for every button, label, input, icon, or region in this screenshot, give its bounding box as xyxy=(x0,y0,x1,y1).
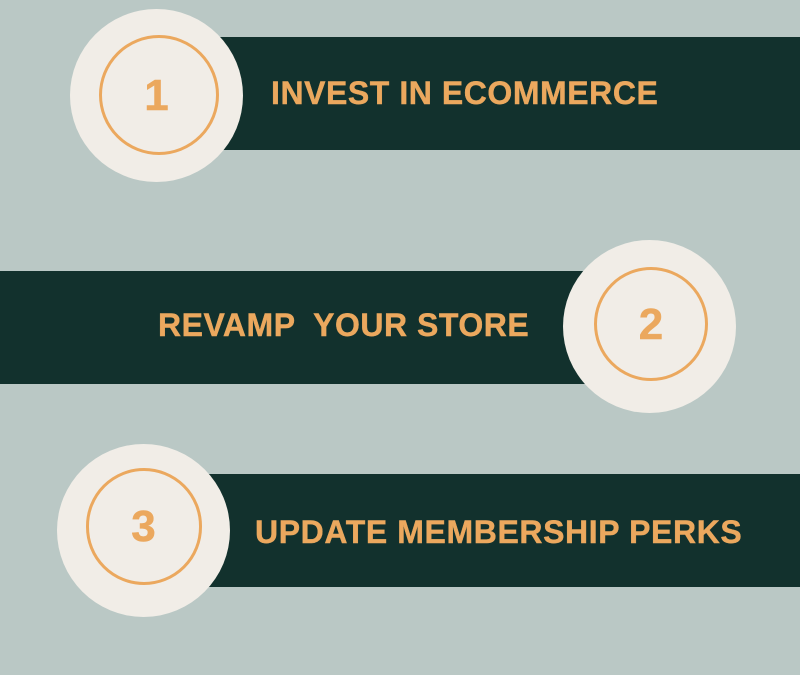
ring: step 2 xyxy=(594,267,708,381)
ring: step 3 xyxy=(86,468,202,584)
band: step 2 xyxy=(0,271,650,384)
number: 2: 2 xyxy=(639,300,663,348)
circle: step 1 number xyxy=(70,9,243,182)
band: step 1 xyxy=(157,37,800,150)
ring: step 1 xyxy=(98,35,218,155)
circle: step 2 number xyxy=(563,240,736,413)
circle: step 3 number xyxy=(57,444,230,617)
heading: update membership perks: UPDATE MEMBERSHIP PERKS xyxy=(255,514,742,550)
heading: invest in ecommerce: INVEST IN ECOMMERCE xyxy=(271,75,658,111)
number: 1: 1 xyxy=(144,71,169,120)
heading: revamp your store: REVAMP YOUR STORE xyxy=(158,307,529,343)
band: step 3 xyxy=(143,474,800,587)
number: 3: 3 xyxy=(131,502,156,551)
